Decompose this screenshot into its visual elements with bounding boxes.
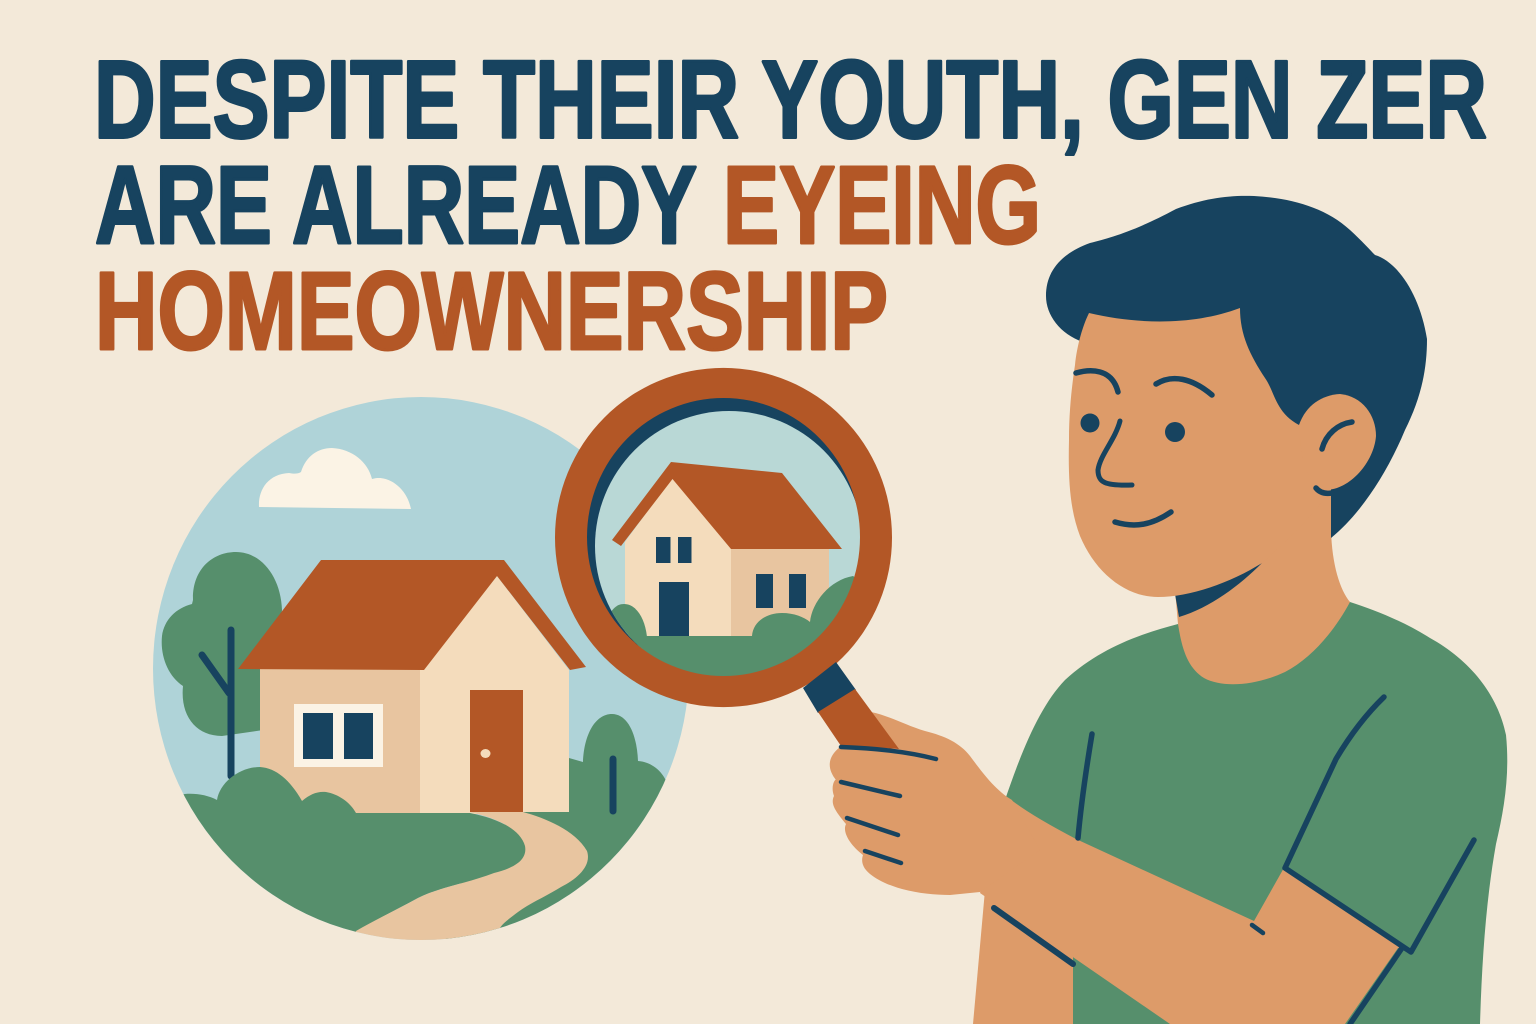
front lawn and bushes (184, 767, 506, 932)
eyes (1080, 414, 1185, 442)
magnified side windows (756, 574, 806, 608)
forearm (980, 799, 1412, 1024)
door (470, 690, 523, 812)
finger lines (841, 747, 936, 863)
ear (1299, 394, 1376, 490)
house side wall (260, 668, 422, 814)
cloud (259, 448, 411, 509)
lens sky (595, 411, 863, 681)
shirt (1000, 600, 1507, 1024)
door knob (480, 749, 490, 758)
window (294, 704, 383, 767)
lens shadow (574, 388, 874, 688)
lower arm outline (994, 908, 1073, 964)
nose (1098, 421, 1132, 485)
winding path (345, 812, 588, 945)
magnified side wall (729, 548, 829, 638)
right shrubs (446, 714, 666, 939)
sleeve hem (1285, 697, 1474, 1024)
neck shadow (1175, 563, 1262, 617)
magnified front wall (625, 478, 731, 638)
house front wall (420, 576, 569, 814)
hand (830, 712, 1040, 895)
right shrub stem (610, 759, 616, 811)
window frame (294, 704, 383, 767)
illustration: person (818, 196, 1507, 1024)
neck (1175, 480, 1350, 684)
scene contents (162, 552, 666, 940)
ear detail (1316, 422, 1352, 493)
title line 2 highlight: EYEING (723, 144, 1041, 267)
shirt lines (1078, 734, 1092, 838)
handle collar (803, 662, 856, 713)
title line 3 highlight: HOMEOWNERSHIP (95, 250, 888, 373)
elbow crease (1252, 925, 1263, 933)
magnified left bush (612, 604, 647, 646)
title line 2 navy: ARE ALREADY (95, 144, 697, 267)
title (94, 38, 1487, 373)
other arm (973, 890, 1075, 1024)
magnified right bush and ground (630, 576, 854, 676)
illustration: house scene circle (150, 397, 700, 960)
sky (153, 397, 689, 940)
head (1069, 308, 1331, 597)
mouth (1115, 512, 1171, 525)
handle grip (818, 689, 899, 749)
tree trunk (202, 630, 231, 776)
magnifier ring (555, 368, 892, 707)
magnified door (659, 582, 689, 637)
illustration: magnifying glass (555, 368, 892, 713)
window panes (303, 713, 373, 759)
magnified upper windows (656, 537, 692, 563)
magnified house (612, 462, 854, 676)
magnified roof (612, 462, 842, 549)
tree left (162, 552, 282, 736)
roof (238, 560, 586, 670)
hair (1046, 196, 1427, 538)
eyebrows (1076, 371, 1212, 395)
